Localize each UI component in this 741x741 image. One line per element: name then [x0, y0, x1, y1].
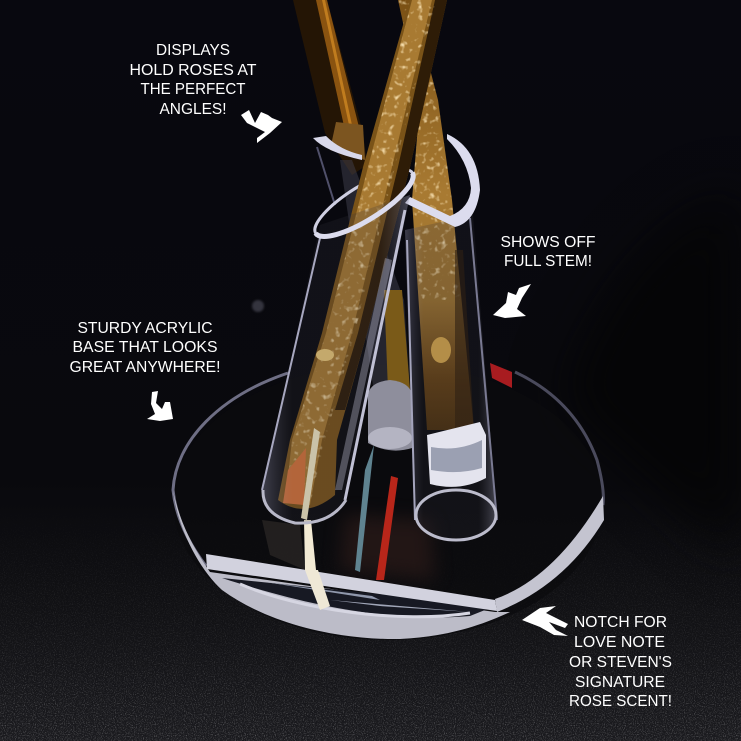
acrylic base disc	[173, 363, 604, 640]
rubber plug	[427, 422, 486, 487]
callout: sturdy acrylic base	[70, 320, 220, 421]
text: notch for love note or scent	[569, 614, 672, 710]
text: displays hold roses at the perfect angles: HOLD ROSES AT	[130, 62, 257, 79]
arrow: to right tube	[493, 284, 531, 318]
text: notch for love note or scent: SIGNATURE	[575, 674, 665, 691]
text: notch for love note or scent: OR STEVEN'S	[569, 654, 672, 671]
text: sturdy acrylic base: GREAT ANYWHERE!	[70, 359, 220, 376]
love-note notch	[206, 554, 497, 611]
right tube with plug	[405, 134, 497, 540]
text: sturdy acrylic base: BASE THAT LOOKS	[72, 339, 218, 356]
front ring, back half	[307, 158, 421, 248]
text: sturdy acrylic base	[70, 320, 220, 376]
text: displays hold roses at the perfect angles	[130, 42, 257, 118]
text: shows off full stem: SHOWS OFF	[500, 234, 596, 251]
callout: notch for love note	[522, 606, 672, 710]
back stem and tube	[293, 0, 412, 451]
callout: shows off full stem	[493, 234, 596, 318]
text: shows off full stem: FULL STEM!	[504, 253, 592, 270]
callout: displays hold roses	[130, 42, 282, 143]
front tube	[262, 173, 421, 524]
text: notch for love note or scent: NOTCH FOR	[574, 614, 667, 631]
text: notch for love note or scent: LOVE NOTE	[574, 634, 665, 651]
front stem	[278, 0, 447, 520]
text: displays hold roses at the perfect angles: ANGLES!	[160, 101, 226, 118]
text: sturdy acrylic base: STURDY ACRYLIC	[78, 320, 213, 337]
text: notch for love note or scent: ROSE SCENT!	[569, 693, 672, 710]
text: shows off full stem	[500, 234, 596, 270]
text: displays hold roses at the perfect angles: THE PERFECT	[140, 81, 246, 98]
arrow: to base	[147, 391, 173, 421]
red reflection	[376, 476, 398, 580]
text: displays hold roses at the perfect angles: DISPLAYS	[156, 42, 230, 59]
arrow: to notch	[522, 606, 568, 636]
arrow: to tube tops	[241, 110, 282, 143]
photo background: black fabric	[0, 299, 741, 741]
right stem	[398, 0, 474, 430]
